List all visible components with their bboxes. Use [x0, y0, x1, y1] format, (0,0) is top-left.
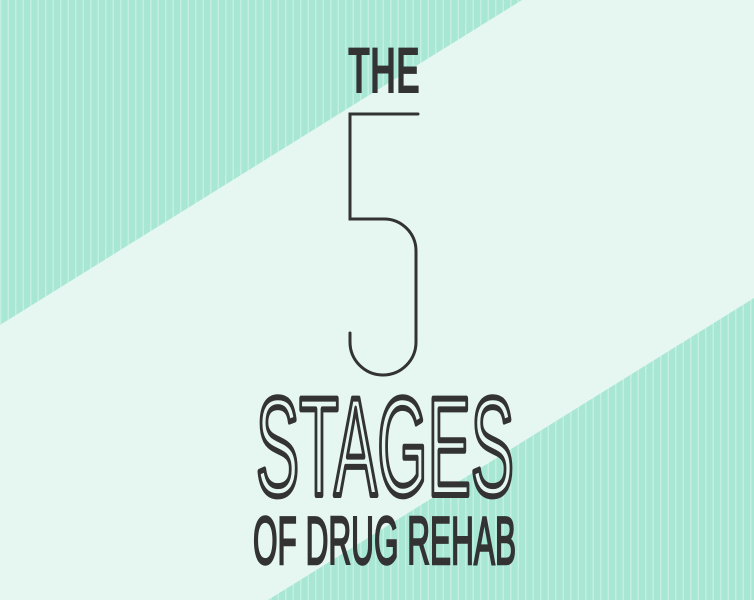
numeral: 5 [350, 114, 418, 378]
band: top-left striped [0, 0, 522, 325]
band: bottom-right striped [268, 298, 754, 600]
heading: THE: THE [348, 33, 420, 107]
